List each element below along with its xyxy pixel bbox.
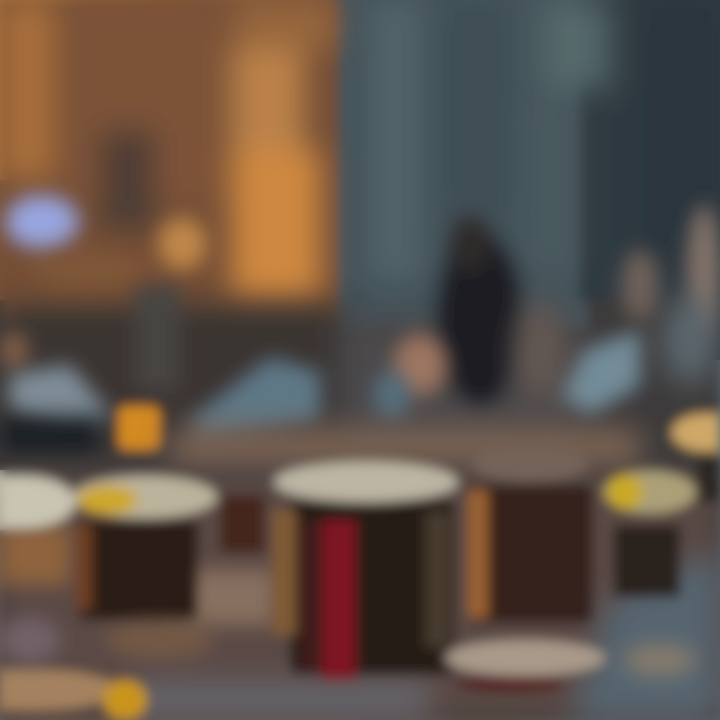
glass: centre red beer [272, 462, 458, 680]
small amber glass [118, 406, 160, 450]
cool vertical streaks [370, 0, 720, 280]
foreground tray and yellow accent [0, 618, 696, 720]
glass: far left [0, 476, 75, 585]
lamp glow and orange light [6, 196, 206, 297]
glass: right brown beer [445, 449, 605, 692]
crowd of seated people [0, 205, 720, 455]
glass: left dark beer with yellow rim [73, 476, 217, 658]
glass: far right amber [672, 414, 720, 502]
warm pillars [0, 0, 335, 300]
small glass behind [220, 495, 265, 553]
glass: right small with yellow rim [604, 471, 696, 597]
table surface [0, 428, 720, 720]
